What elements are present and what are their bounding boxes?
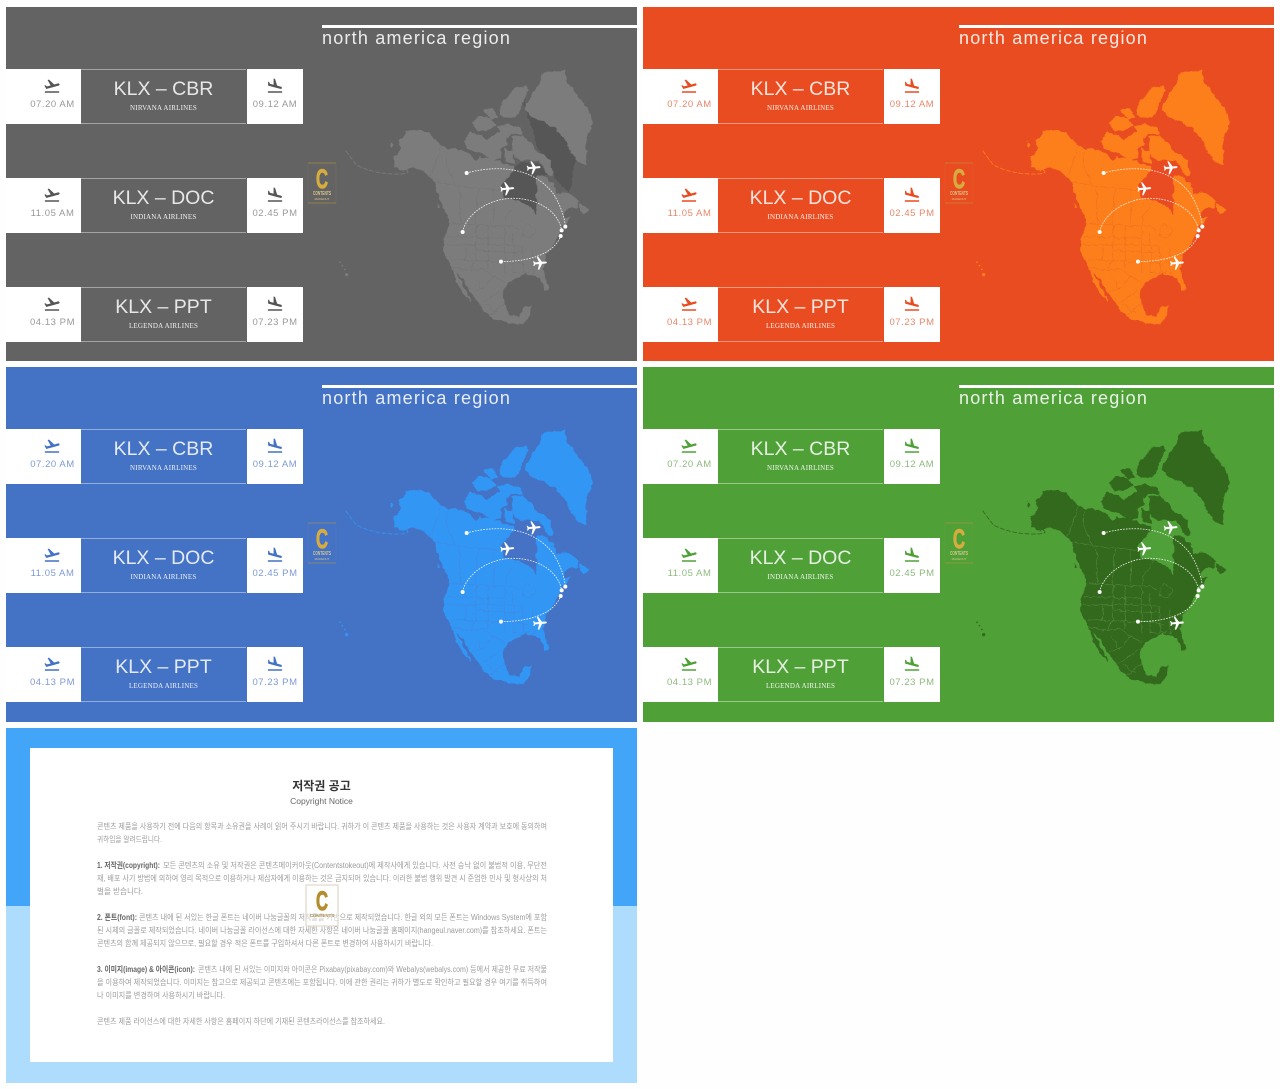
flight row: KLX-DOC: INDIANA AIRLINES [130,213,196,221]
title bar [322,25,637,28]
flight row: KLX-DOC: KLX – DOC [113,187,214,209]
flight row: KLX-PPT: 07.23 PM [252,317,298,328]
panel: orange slide [643,7,1274,361]
flight row: KLX-DOC: 02.45 PM [252,568,298,579]
intro paragraph [97,821,547,844]
map: north america with flight routes [339,70,593,325]
flight row: KLX-PPT: 04.13 PM [30,677,75,688]
flight row: KLX-DOC: 11.05 AM [31,208,74,219]
flight row: KLX-PPT [6,647,303,702]
flight row: KLX-PPT: KLX – PPT [115,296,212,318]
flight row: KLX-DOC: INDIANA AIRLINES [767,573,834,581]
notice subtitle: Copyright Notice [290,796,353,806]
flight row: KLX-PPT: LEGENDA AIRLINES [129,682,198,690]
logo badge [308,162,336,204]
flight row: KLX-CBR [643,429,940,484]
intro paragraph: 귀하임을 알려드립니다. [97,834,162,844]
logo badge [944,522,974,564]
flight row: KLX-CBR: NIRVANA AIRLINES [130,104,197,112]
flight row: KLX-PPT: LEGENDA AIRLINES [766,682,835,690]
flight row: KLX-CBR: NIRVANA AIRLINES [767,464,834,472]
map: north america with flight routes [339,430,593,685]
flight row: KLX-DOC: 02.45 PM [252,208,298,219]
section 3 image and icon: 3. 이미지(image) & 아이콘(icon): [97,964,195,974]
section 2 font: 콘텐츠의 함께 제공되지 않으므로, 필요할 경우 적은 폰트를 구입하셔서 다른 폰트로 변경하여 사용하시기 바랍니다. [97,938,433,948]
notice title: 저작권 공고 [292,778,351,793]
flight row: KLX-DOC [643,178,940,233]
flight row: KLX-CBR: KLX – CBR [751,78,850,100]
notice body [97,821,548,1026]
flight row: KLX-CBR: KLX – CBR [114,78,213,100]
section 3 image and icon: 콘텐츠 내에 된 서있는 이미지와 아이콘은 Pixabay(pixabay.com)와 Webalys(webalys.com) 등에서 제공한 무료 저작물 [198,964,547,974]
flight row: KLX-CBR: 07.20 AM [667,459,712,470]
section 2 font: 된 시체의 글꼴로 제작되었습니다. 네이버 나눔글꼴 라이선스에 대한 자세한 사항은 네이버 나눔글꼴 홈페이지(hangeul.naver.com)를 참조하세요. 폰트는 [97,925,547,935]
logo badge [945,162,973,204]
flight row: KLX-PPT: 04.13 PM [30,317,75,328]
section 2 font: 2. 폰트(font): [97,913,137,922]
section 1 copyright: 재, 배포 사기 방법에 의하여 영리 목적으로 이용하거나 제삼자에게 이용하는 것은 금지되어 있습니다. 이러한 불법 행위 발견 시 준엄한 민사 및 형사상의 처 [97,873,547,883]
flight row: KLX-DOC: 02.45 PM [889,568,935,579]
flight row: KLX-PPT: KLX – PPT [752,296,849,318]
flight row: KLX-PPT: KLX – PPT [115,656,212,678]
title bar [322,385,637,388]
flight row: KLX-CBR: 09.12 AM [253,459,297,470]
heading: north america region [322,388,511,408]
flight row: KLX-DOC [6,178,303,233]
flight row: KLX-DOC [643,538,940,593]
flight row: KLX-PPT [643,647,940,702]
flight row: KLX-CBR [6,69,303,124]
heading: north america region [959,388,1148,408]
flight row: KLX-PPT: 04.13 PM [667,317,712,328]
flight row: KLX-DOC: 11.05 AM [668,208,711,219]
flight row: KLX-PPT: 07.23 PM [252,677,298,688]
intro paragraph: 콘텐츠 제품을 사용하기 전에 다음의 항목과 소유권을 사례이 읽어 주시기 바랍니다. 귀하가 이 콘텐츠 제품을 사용하는 것은 사용자 계약과 보호에 동의하여 [97,821,547,831]
flight row: KLX-DOC: KLX – DOC [750,547,851,569]
map: north america with flight routes [976,430,1230,685]
flight row: KLX-DOC: 11.05 AM [668,568,711,579]
flight row: KLX-CBR: 09.12 AM [890,459,934,470]
flight row: KLX-CBR: 07.20 AM [30,459,75,470]
section 1 copyright [97,860,547,896]
flight row: KLX-PPT: LEGENDA AIRLINES [129,322,198,330]
flight row: KLX-CBR: NIRVANA AIRLINES [767,104,834,112]
title bar [959,25,1274,28]
map: north america with flight routes [976,70,1230,325]
flight row: KLX-CBR: 09.12 AM [253,99,297,110]
panel: gray slide [6,7,637,361]
section 3 image and icon [97,964,547,1000]
flight row: KLX-CBR: 07.20 AM [30,99,75,110]
flight row: KLX-PPT: KLX – PPT [752,656,849,678]
flight row: KLX-CBR [643,69,940,124]
flight row: KLX-CBR: 09.12 AM [890,99,934,110]
flight row: KLX-DOC: INDIANA AIRLINES [767,213,834,221]
section 1 copyright: 모든 콘텐츠의 소유 및 저작권은 콘텐츠메이커아웃(Contentstokeout)에 제작사에게 있습니다. 사전 승낙 없이 불법적 이용, 무단전 [163,860,547,870]
flight row: KLX-DOC: INDIANA AIRLINES [130,573,196,581]
flight row: KLX-PPT: 04.13 PM [667,677,712,688]
panel: green slide [643,367,1274,722]
flight row: KLX-PPT: 07.23 PM [889,677,935,688]
flight row: KLX-DOC: 11.05 AM [31,568,74,579]
panel: blue slide [6,367,637,722]
notice logo badge [306,885,338,926]
flight row: KLX-CBR: 07.20 AM [667,99,712,110]
logo badge [308,522,336,564]
section 2 font: 콘텐츠 내에 된 서있는 한글 폰트는 네이버 나눔글꼴의 저작물을 기반으로 제작되었습니다. 한글 외의 모든 폰트는 Windows System에 포함 [139,912,548,922]
flight row: KLX-PPT [6,287,303,342]
flight row: KLX-CBR: KLX – CBR [751,438,850,460]
title bar [959,385,1274,388]
section 2 font [97,912,548,948]
section 3 image and icon: 을 이용하여 제작되었습니다. 이미지는 참고으로 제공되고 콘텐츠에는 포함됩니다. 이에 관한 권리는 귀하가 별도로 확인하고 필요할 경우 여기를 취득하여 [97,977,547,987]
section 1 copyright: 벌을 받습니다. [97,886,143,896]
flight row: KLX-CBR: NIRVANA AIRLINES [130,464,197,472]
flight row: KLX-DOC [6,538,303,593]
flight row: KLX-DOC: KLX – DOC [750,187,851,209]
flight row: KLX-CBR: KLX – CBR [114,438,213,460]
flight row: KLX-CBR [6,429,303,484]
flight row: KLX-PPT [643,287,940,342]
section 3 image and icon: 나 이미지를 변경하여 사용하시기 바랍니다. [97,990,225,1000]
flight row: KLX-PPT: LEGENDA AIRLINES [766,322,835,330]
notice logo badge: CONTENTS [310,913,334,918]
heading: north america region [322,28,511,48]
flight row: KLX-DOC: 02.45 PM [889,208,935,219]
section 1 copyright: 1. 저작권(copyright): [97,860,160,870]
notice logo badge: C [316,886,328,916]
flight row: KLX-PPT: 07.23 PM [889,317,935,328]
closing line: 콘텐츠 제품 라이선스에 대한 자세한 사항은 홈페이지 하단에 기재된 콘텐츠라이선스를 참조하세요. [97,1016,385,1026]
flight row: KLX-DOC: KLX – DOC [113,547,214,569]
heading: north america region [959,28,1148,48]
